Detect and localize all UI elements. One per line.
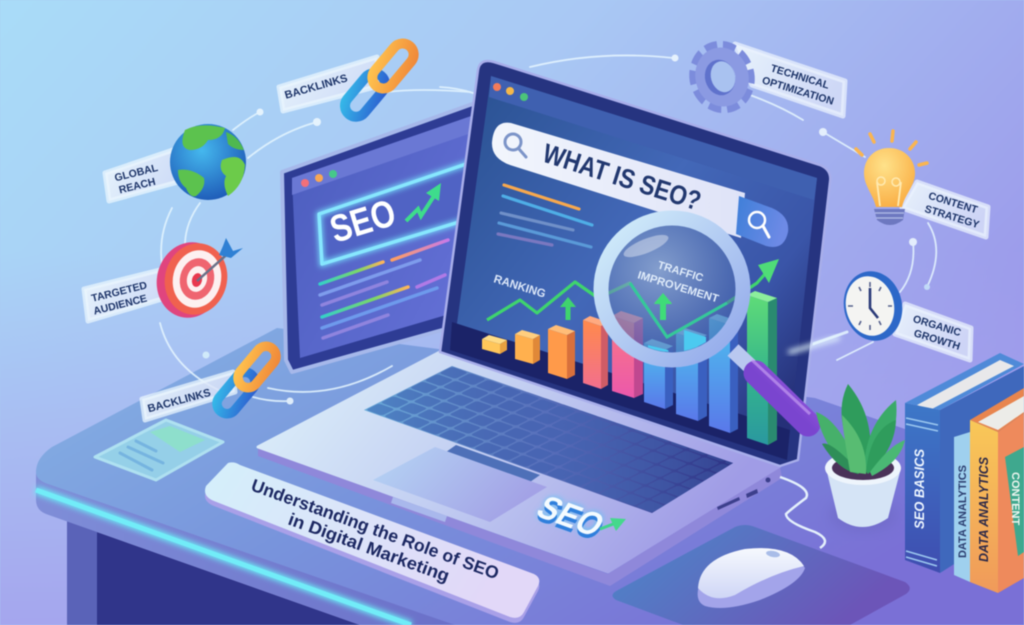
label: targeted audience [84,270,162,321]
title plate: Understanding the Role of SEO [249,475,502,583]
label: technical optimization: OPTIMIZATION [761,75,835,108]
label: technical optimization: TECHNICAL [769,63,831,92]
book: data analytics thin [954,432,970,582]
icon: chain link bottom [213,342,280,418]
monitor screen [292,113,480,358]
mouse cable [780,477,825,548]
label: targeted audience: TARGETED [90,279,149,305]
label: backlinks top [279,57,379,111]
lens content [630,283,727,360]
search button [736,196,788,247]
plant [816,384,905,531]
connector arcs [160,54,936,404]
label: organic growth [895,304,971,360]
SEO logo on laptop: SEO [529,494,611,548]
monitor title bar [292,113,480,195]
book: content green: CONTENT [1009,472,1021,525]
book: data analytics orange [970,388,1024,593]
space bar [446,445,540,482]
icon: clock [837,266,909,346]
magnifying glass [601,218,810,424]
label: targeted audience: AUDIENCE [92,293,148,318]
monitor with SEO dashboard [282,102,480,372]
laptop [258,61,830,586]
mouse pad [612,525,910,625]
label: backlinks bottom: BACKLINKS [146,387,212,415]
icon: target with arrow [149,235,243,325]
laptop base [258,352,782,586]
browser dots [493,83,528,101]
label: global reach [105,150,178,201]
label: content strategy [902,182,988,237]
label: traffic improvement: IMPROVEMENT [636,269,720,306]
title plate: in Digital Marketing [286,509,452,586]
mouse [698,548,805,608]
label: backlinks bottom [142,372,235,420]
lens highlight [621,231,671,261]
label: content strategy: CONTENT [927,190,979,216]
label: global reach: GLOBAL [113,162,160,184]
label: traffic improvement: TRAFFIC [656,259,705,285]
trackpad notch [391,497,447,522]
search icon left [505,134,526,157]
bar chart [482,291,777,445]
search bar [492,123,788,247]
book: content green [1005,447,1024,556]
icon: chain link top [341,39,418,121]
monitor content lines [320,240,448,338]
magnifier lens [608,225,736,353]
book: seo basics [905,353,1024,573]
keyboard [364,366,733,513]
laptop ports [717,478,770,510]
monitor SEO neon box: SEO [325,192,401,252]
label: technical optimization [735,44,845,116]
book: data analytics orange: DATA ANALYTICS [976,457,991,562]
heading: what is seo: WHAT IS SEO? [539,138,705,216]
pot [826,468,901,527]
magnifier ring [601,218,743,360]
SEO logo on laptop: SEO [529,490,611,544]
icon: gear [687,39,757,115]
label: ranking: RANKING [492,273,547,301]
book: data analytics thin: DATA ANALYTICS [957,465,969,558]
SEO logo on laptop: SEO [529,490,611,544]
label: global reach: REACH [118,176,157,196]
ranking trend line [487,259,779,337]
screen text lines [498,185,592,247]
magnifier handle [733,350,810,424]
leaves [816,384,905,476]
trackpad [373,447,547,522]
label: organic growth: GROWTH [912,327,962,353]
icon: light bulb [856,131,927,225]
monitor SEO neon box [319,162,472,264]
laptop lid [440,61,830,466]
label: content strategy: STRATEGY [923,203,981,231]
books [905,353,1024,593]
label: organic growth: ORGANIC [911,313,963,339]
desk [36,328,1024,625]
book: seo basics: SEO BASICS [912,449,927,529]
notepad on desk [95,420,223,480]
icon: globe [170,124,246,200]
label: backlinks top: BACKLINKS [283,72,349,102]
title plate [205,462,539,623]
glow streak right of laptop [790,338,838,352]
